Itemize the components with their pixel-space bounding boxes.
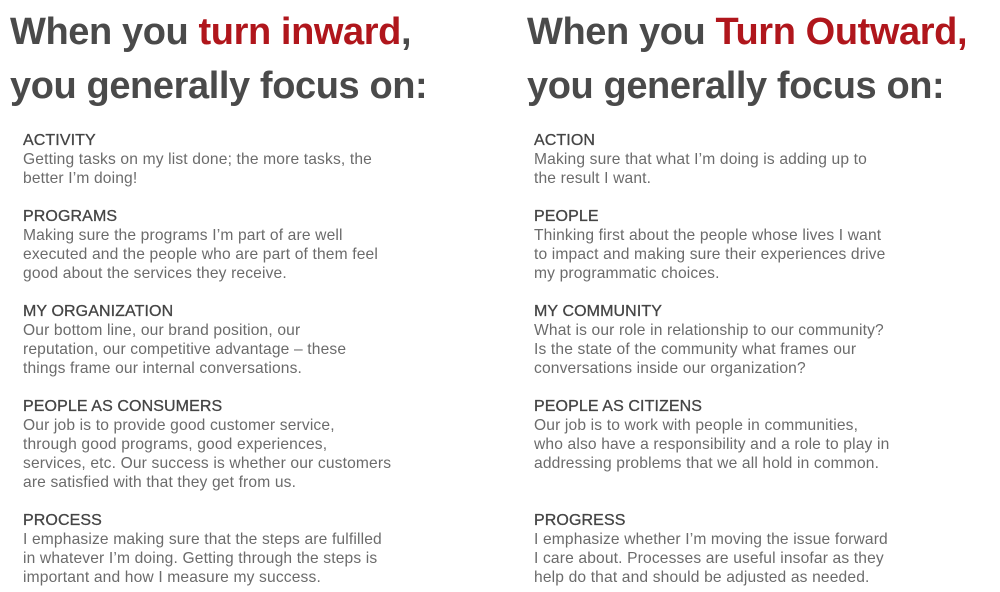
section: progress [534,512,888,586]
section: programs: executed and the people who are part of them feel [23,246,378,263]
section: people as citizens: who also have a responsibility and a role to play in [534,436,889,453]
section: process: PROCESS [23,512,102,529]
section: activity: Getting tasks on my list done; the more tasks, the [23,151,372,168]
title: inward [10,11,427,107]
section: my organization: reputation, our competitive advantage – these [23,341,346,358]
section: my community: Is the state of the community what frames our [534,341,856,358]
section: progress: help do that and should be adjusted as needed. [534,569,870,586]
section: people as consumers: PEOPLE AS CONSUMERS [23,398,222,415]
section: progress: PROGRESS [534,512,626,529]
section: people as citizens: PEOPLE AS CITIZENS [534,398,702,415]
section: process [23,512,382,586]
section: action [534,132,867,187]
section: progress: I care about. Processes are useful insofar as they [534,550,884,567]
section: people [534,208,885,282]
title: inward: you generally focus on: [10,65,427,107]
section: programs [23,208,378,282]
section: my community: MY COMMUNITY [534,303,662,320]
section: my community: conversations inside our organization? [534,360,806,377]
section: people: my programmatic choices. [534,265,720,282]
section: my organization: MY ORGANIZATION [23,303,173,320]
section: programs: good about the services they receive. [23,265,287,282]
section: my community [534,303,884,377]
section: people as citizens [534,398,889,472]
title: outward: you generally focus on: [527,65,944,107]
section: process: important and how I measure my success. [23,569,321,586]
section: people: PEOPLE [534,208,599,225]
section: people as consumers: services, etc. Our success is whether our customers [23,455,391,472]
section: process: I emphasize making sure that the steps are fulfilled [23,531,382,548]
section: my organization [23,303,346,377]
section: my organization: things frame our internal conversations. [23,360,302,377]
section: my organization: Our bottom line, our brand position, our [23,322,300,339]
section: action: Making sure that what I’m doing is adding up to [534,151,867,168]
title: inward: When you turn inward, [10,11,411,53]
section: people as consumers [23,398,391,491]
section: process: in whatever I’m doing. Getting through the steps is [23,550,377,567]
section: activity [22,132,372,187]
section: people as citizens: addressing problems that we all hold in common. [534,455,879,472]
panel: outward list [534,132,889,586]
section: my community: What is our role in relationship to our community? [534,322,884,339]
section: progress: I emphasize whether I’m moving the issue forward [534,531,888,548]
section: activity: better I’m doing! [23,170,137,187]
title: outward [527,11,967,107]
panel: inward list [22,132,391,586]
section: people as consumers: Our job is to provide good customer service, [23,417,335,434]
section: people: Thinking first about the people whose lives I want [534,227,881,244]
section: people as consumers: are satisfied with that they get from us. [23,474,296,491]
section: people as consumers: through good programs, good experiences, [23,436,327,453]
section: programs: Making sure the programs I’m part of are well [23,227,343,244]
section: people: to impact and making sure their experiences drive [534,246,885,263]
section: programs: PROGRAMS [23,208,117,225]
title: outward: When you Turn Outward, [527,11,967,53]
section: action: the result I want. [534,170,651,187]
section: people as citizens: Our job is to work with people in communities, [534,417,858,434]
section: action: ACTION [534,132,595,149]
section: activity: ACTIVITY [23,132,96,149]
